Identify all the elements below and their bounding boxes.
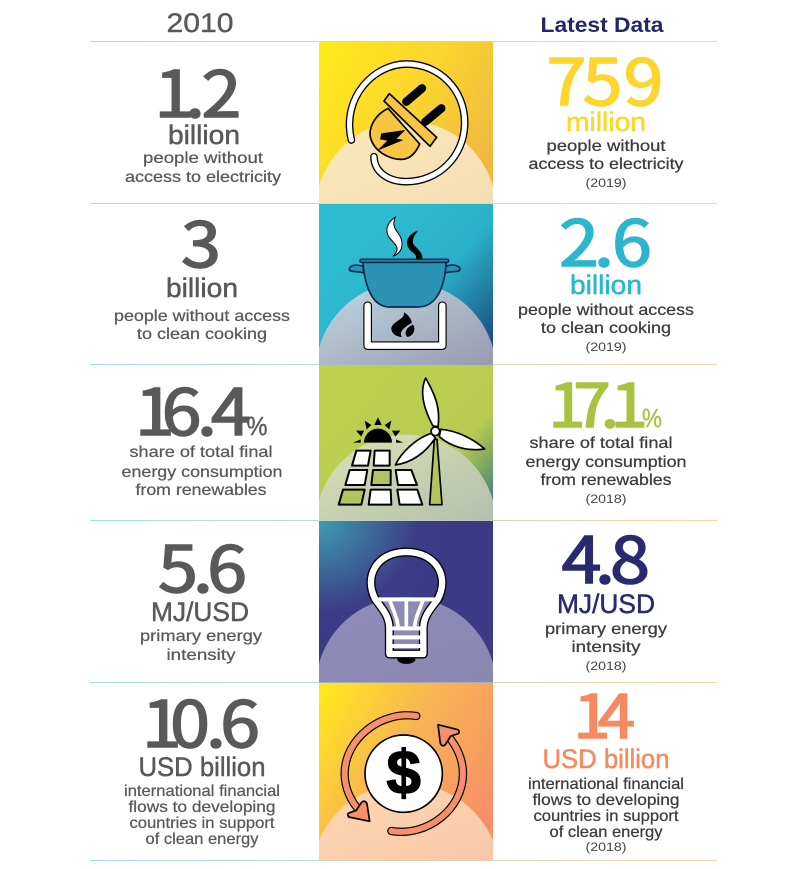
icon: power cord	[350, 64, 465, 182]
row 1 right: 759 million	[528, 31, 684, 190]
row 5 left: 10.6 USD billion: 10.6	[142, 673, 260, 766]
row 4 left: 5.6 MJ/USD: intensity	[166, 647, 236, 664]
icon: stove stand	[368, 306, 442, 346]
row 3 left: 16.4% renewables: share of total final	[130, 444, 272, 461]
row 5 right: 14 USD billion: international financial	[528, 776, 684, 793]
icon: dollar coin	[365, 735, 442, 812]
panel: cooking pot icon	[319, 204, 493, 365]
icon: wind turbine	[395, 378, 485, 505]
row 1 left: 1.2 billion without electricity	[125, 43, 281, 186]
row 1 left: 1.2 billion without electricity: people without	[143, 150, 264, 167]
row 5 left: 10.6 USD billion: of clean energy	[146, 831, 258, 848]
row 1 right: 759 million: people without	[546, 138, 666, 155]
column heading: 2010: 2010	[166, 8, 234, 38]
icon: solar panels	[339, 451, 422, 505]
row 2 right: 2.6 billion: 2.6	[559, 192, 652, 285]
row 1 left: 1.2 billion without electricity: 1.2	[154, 43, 241, 136]
row 5 right: 14 USD billion: USD billion	[542, 744, 670, 774]
icon: dollar coin: $	[386, 739, 421, 808]
row 5 right: 14 USD billion: flows to developing	[532, 792, 680, 809]
row 4 left: 5.6 MJ/USD	[140, 518, 262, 664]
row 3 left: 16.4% renewables: 16.4	[135, 361, 251, 454]
row 5 left: 10.6 USD billion: countries in support	[130, 815, 275, 832]
row 2 right: 2.6 billion: billion	[570, 270, 642, 300]
row 2 left: 3 billion clean cooking: 3	[181, 193, 221, 286]
row 3 right: 17.1%: %	[642, 403, 662, 433]
row 5 left: 10.6 USD billion: USD billion	[138, 752, 266, 782]
row 3 left: 16.4% renewables: %	[246, 411, 268, 441]
row 4 left: 5.6 MJ/USD: primary energy	[140, 628, 262, 645]
row 2 left: 3 billion clean cooking: people without access	[114, 308, 290, 325]
row 3 left: 16.4% renewables: from renewables	[136, 482, 266, 499]
icon: pot	[349, 259, 460, 307]
row 4 right: 4.8 MJ/USD	[545, 509, 667, 673]
row 2 left: 3 billion clean cooking	[114, 193, 290, 343]
row 2 right: 2.6 billion	[518, 192, 694, 354]
panel: electricity plug icon	[319, 42, 493, 203]
row 3 right: 17.1%	[526, 358, 686, 506]
row 4 left: 5.6 MJ/USD: MJ/USD	[151, 597, 249, 627]
row 1 right: 759 million: (2019)	[586, 178, 627, 190]
row 1 right: 759 million: 759	[547, 31, 663, 124]
icon: sun	[353, 417, 403, 443]
row 1 left: 1.2 billion without electricity: access to electricity	[125, 169, 281, 186]
row 3 right: 17.1%: energy consumption	[526, 454, 686, 471]
panel: renewable energy icon	[319, 365, 493, 520]
row 1 left: 1.2 billion without electricity: billion	[168, 120, 240, 150]
row 4 right: 4.8 MJ/USD: intensity	[572, 639, 640, 656]
row 3 right: 17.1%: from renewables	[540, 472, 672, 489]
row 5 left: 10.6 USD billion: flows to developing	[128, 799, 276, 816]
row 5 right: 14 USD billion	[528, 669, 684, 854]
row 3 left: 16.4% renewables	[122, 361, 282, 499]
row 5 left: 10.6 USD billion: international financial	[124, 783, 280, 800]
icon: bulb	[371, 552, 442, 664]
icon: steam	[387, 217, 422, 260]
row 5 right: 14 USD billion: of clean energy	[550, 824, 662, 841]
row 2 left: 3 billion clean cooking: to clean cooking	[137, 326, 267, 343]
row 2 right: 2.6 billion: (2019)	[586, 342, 627, 354]
row 5 left: 10.6 USD billion	[124, 673, 280, 848]
row 3 left: 16.4% renewables: energy consumption	[122, 464, 282, 481]
row 4 right: 4.8 MJ/USD: 4.8	[562, 509, 650, 602]
panel: finance flows icon	[319, 683, 493, 860]
row 5 right: 14 USD billion: (2018)	[586, 842, 627, 854]
row 1 right: 759 million: access to electricity	[528, 156, 684, 173]
icon: circular arrows	[345, 715, 463, 832]
row 2 right: 2.6 billion: to clean cooking	[541, 320, 671, 337]
icon: plug	[370, 88, 441, 159]
row 4 right: 4.8 MJ/USD: (2018)	[586, 661, 627, 673]
row 4 right: 4.8 MJ/USD: primary energy	[545, 621, 667, 638]
row 2 left: 3 billion clean cooking: billion	[166, 273, 238, 303]
row 2 right: 2.6 billion: people without access	[518, 302, 694, 319]
row 3 right: 17.1%: 17.1	[548, 358, 648, 445]
icon: flame	[391, 312, 414, 337]
row 3 right: 17.1%: share of total final	[530, 435, 672, 452]
panel: light bulb icon	[319, 521, 493, 682]
column heading: Latest Data: Latest Data	[540, 14, 664, 37]
row 5 right: 14 USD billion: 14	[573, 669, 635, 756]
row 1 right: 759 million: million	[566, 107, 646, 137]
row 3 right: 17.1%: (2018)	[586, 494, 627, 506]
row 4 left: 5.6 MJ/USD: 5.6	[158, 518, 247, 611]
row 4 right: 4.8 MJ/USD: MJ/USD	[557, 589, 655, 619]
row 5 right: 14 USD billion: countries in support	[534, 808, 679, 825]
